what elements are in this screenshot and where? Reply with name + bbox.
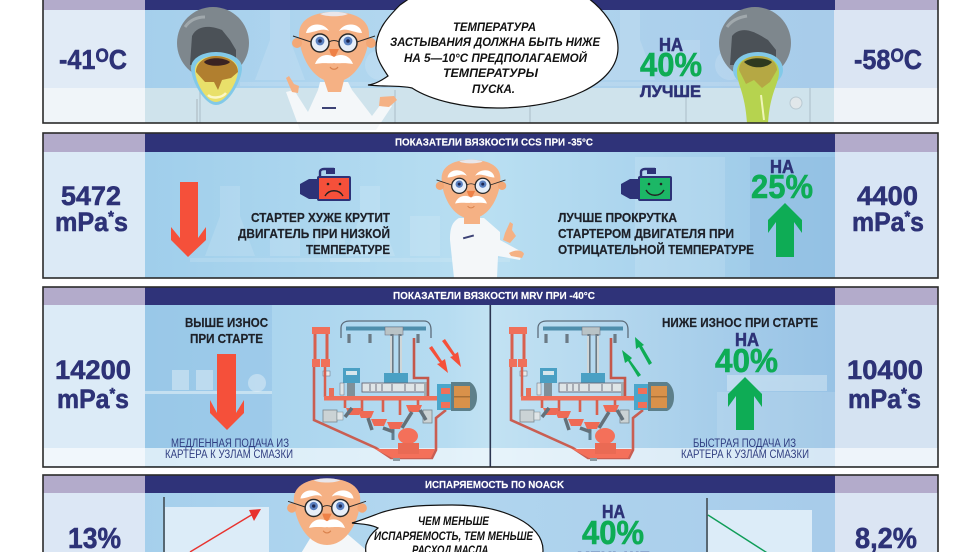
header band: Noack volatility: ИСПАРЯЕМОСТЬ ПО NOACK [425, 479, 564, 491]
character: professor [287, 478, 372, 552]
value: 5472 mPa*s: s [114, 207, 128, 237]
value: 10400 mPa*s: s [907, 384, 921, 414]
header band: CCS viscosity: ПОКАЗАТЕЛИ ВЯЗКОСТИ CCS ПРИ -35°C [395, 136, 593, 148]
speech bubble: pour point advice: ТЕМПЕРАТУРА [453, 20, 536, 34]
text: better cranking [558, 210, 754, 257]
callout: 25%: 25% [751, 168, 813, 205]
value: 5472 mPa*s: mPa [55, 207, 112, 237]
value: 4400 mPa*s: mPa [852, 207, 909, 237]
text: worse cranking: ТЕМПЕРАТУРЕ [306, 242, 390, 257]
icon: sad starter motor [300, 168, 350, 200]
text: worse cranking [238, 210, 390, 257]
callout: 40% less: НА [602, 502, 625, 522]
speech bubble: pour point advice: НА 5—10°C ПРЕДПОЛАГАЕМОЙ [404, 49, 587, 65]
callout: 40% less: 40% [582, 514, 644, 551]
header band: MRV viscosity [43, 287, 938, 305]
speech bubble: volatility advice: ЧЕМ МЕНЬШЕ [418, 514, 490, 528]
value: -58°C: -58 [854, 44, 894, 75]
callout: 40% better: ЛУЧШЕ [640, 82, 701, 101]
speech bubble: pour point advice: ЗАСТЫВАНИЯ ДОЛЖНА БЫТЬ НИЖЕ [390, 35, 601, 49]
panel: Noack volatility [43, 475, 938, 552]
text: worse cranking: СТАРТЕР ХУЖЕ КРУТИТ [251, 210, 390, 225]
text: worse cranking: ДВИГАТЕЛЬ ПРИ НИЗКОЙ [238, 226, 390, 241]
arrows: green flow [622, 337, 652, 377]
text: fast oil feed: БЫСТРАЯ ПОДАЧА ИЗ [693, 438, 796, 450]
callout: 40% less [577, 502, 650, 552]
header band: pour point [43, 0, 938, 10]
callout: 40% better: 40% [640, 46, 702, 83]
value: -41°C: C [109, 44, 127, 75]
text: slow oil feed [165, 438, 293, 461]
arrow: green up [768, 203, 802, 257]
callout: 40%: НА [735, 330, 759, 350]
text: fast oil feed [681, 438, 809, 461]
text: higher wear [185, 315, 269, 346]
text: higher wear: ВЫШЕ ИЗНОС [185, 315, 269, 330]
panel: CCS viscosity [43, 133, 938, 278]
diagram: engine lubrication, slow [312, 321, 477, 461]
value: 10400 mPa*s: 10400 [847, 355, 923, 385]
icon: thin oil nozzle [719, 7, 791, 123]
character: professor with raised finger [286, 12, 397, 130]
arrow: red down [210, 354, 244, 430]
panel: pour point [43, 0, 938, 130]
value: 14200 mPa*s: mPa [57, 384, 114, 414]
value: 14200 mPa*s: 14200 [55, 355, 131, 385]
text: slow oil feed: КАРТЕРА К УЗЛАМ СМАЗКИ [165, 449, 293, 461]
value: 5472 mPa*s: 5472 [61, 181, 121, 211]
value: -58°C: O [890, 46, 904, 67]
value: 10400 mPa*s [847, 355, 923, 414]
value: -41°C: O [95, 46, 109, 67]
text: higher wear: ПРИ СТАРТЕ [190, 331, 263, 346]
chart: falling volatility [707, 498, 812, 552]
value: 14200 mPa*s [55, 355, 131, 414]
arrow: green up [728, 377, 762, 430]
value: 5472 mPa*s: * [108, 209, 115, 226]
value: 4400 mPa*s: 4400 [857, 181, 918, 211]
value: 14200 mPa*s: s [115, 384, 129, 414]
diagram: engine lubrication, fast [509, 321, 674, 461]
value: 4400 mPa*s: s [910, 207, 924, 237]
value: -58°C: C [904, 44, 922, 75]
arrow: red down [171, 182, 206, 257]
panel: MRV viscosity [43, 287, 938, 467]
chart: rising volatility [164, 497, 269, 552]
callout: 40% better [640, 35, 702, 101]
header band: MRV viscosity: ПОКАЗАТЕЛИ ВЯЗКОСТИ MRV ПРИ -40°C [393, 290, 595, 302]
text: better cranking: ОТРИЦАТЕЛЬНОЙ ТЕМПЕРАТУРЕ [558, 242, 754, 257]
value: 4400 mPa*s [852, 181, 924, 237]
callout: 40% better: НА [659, 35, 683, 55]
speech bubble: pour point advice: ПУСКА. [472, 82, 515, 96]
text: better cranking: СТАРТЕРОМ ДВИГАТЕЛЯ ПРИ [558, 226, 734, 241]
speech bubble: volatility advice: ИСПАРЯЕМОСТЬ, ТЕМ МЕНЬШЕ [374, 529, 534, 543]
text: fast oil feed: КАРТЕРА К УЗЛАМ СМАЗКИ [681, 449, 809, 461]
text: slow oil feed: МЕДЛЕННАЯ ПОДАЧА ИЗ [171, 438, 289, 450]
arrows: red flow [429, 339, 461, 373]
text: better cranking: ЛУЧШЕ ПРОКРУТКА [558, 210, 678, 225]
value: -41°C: -41 [59, 44, 99, 75]
icon: happy starter motor [621, 168, 671, 200]
text: lower wear: НИЖЕ ИЗНОС ПРИ СТАРТЕ [662, 315, 818, 330]
value: 10400 mPa*s: * [901, 386, 908, 403]
speech bubble: pour point advice: ТЕМПЕРАТУРЫ [443, 66, 539, 80]
speech bubble: pour point advice [368, 0, 618, 108]
icon: thick oil nozzle [177, 7, 249, 123]
header band: Noack volatility [43, 475, 938, 493]
callout: 40%: 40% [715, 342, 778, 379]
callout: 25%: НА [770, 157, 794, 177]
value: 5472 mPa*s [55, 181, 128, 237]
header band: CCS viscosity [43, 133, 938, 152]
character: professor pointing [436, 160, 524, 278]
value: 14200 mPa*s: * [109, 386, 116, 403]
value: 10400 mPa*s: mPa [848, 384, 905, 414]
value: 4400 mPa*s: * [904, 209, 911, 226]
speech bubble: volatility advice [352, 505, 543, 552]
